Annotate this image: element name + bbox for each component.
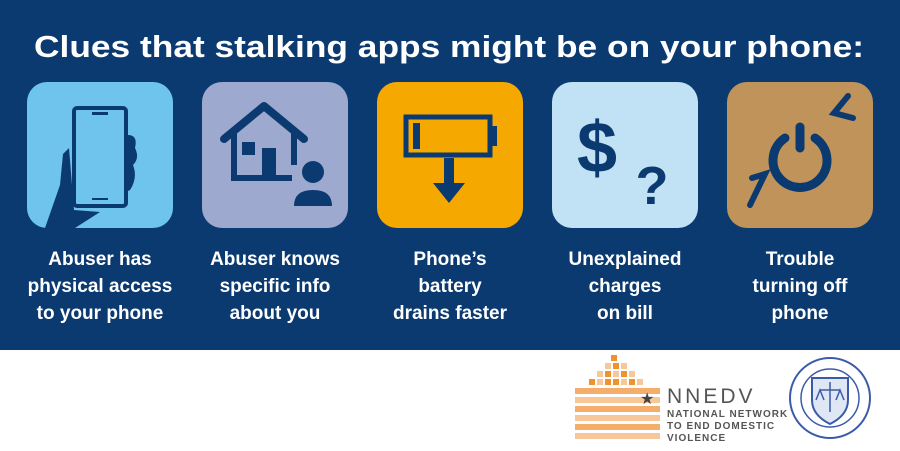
- text block: labels: phone: [772, 303, 828, 324]
- panel: blue background: [0, 0, 900, 350]
- icon: power button with sparks: [750, 96, 853, 205]
- text block: labels: physical access: [28, 276, 172, 297]
- text block: labels: to your phone: [37, 303, 163, 324]
- logo: NNEDV: ★: [640, 391, 654, 408]
- panel: trouble turning off: [727, 82, 873, 228]
- panel: knows specific info: [202, 82, 348, 228]
- text block: labels: Unexplained: [569, 249, 681, 270]
- logo: NNEDV: VIOLENCE: [667, 433, 726, 444]
- logo: NNEDV: NATIONAL NETWORK: [667, 409, 788, 420]
- logo: NNEDV: [575, 355, 788, 444]
- panel: unexplained charges: [552, 82, 698, 228]
- panel: physical access: [27, 82, 173, 228]
- icon: dollar and question mark: [577, 108, 668, 216]
- logo: NNEDV: NNEDV: [667, 385, 756, 408]
- text block: labels: Phone’s: [413, 249, 487, 270]
- text block: labels: Abuser knows: [210, 249, 340, 270]
- text block: labels: on bill: [597, 303, 653, 324]
- text block: labels: charges: [589, 276, 661, 297]
- text block: labels: about you: [230, 303, 320, 324]
- logo: FTC seal: [790, 358, 870, 438]
- text block: labels: drains faster: [393, 303, 508, 324]
- text block: labels: Abuser has: [48, 249, 152, 270]
- text block: labels: Trouble: [766, 249, 834, 270]
- icon: battery with down arrow: [406, 117, 497, 203]
- text block: labels: [28, 249, 848, 324]
- logo: NNEDV: TO END DOMESTIC: [667, 421, 775, 432]
- title: Clues that stalking apps might be on your phone:: [34, 29, 864, 64]
- icon: hand holding phone: [45, 108, 137, 228]
- icon: house and person: [224, 106, 332, 206]
- icon: dollar and question mark: ?: [636, 156, 668, 216]
- text block: labels: specific info: [220, 276, 330, 297]
- text block: labels: battery: [418, 276, 482, 297]
- icon: dollar and question mark: $: [577, 108, 617, 188]
- text block: labels: turning off: [753, 276, 848, 297]
- panel: battery drains: [377, 82, 523, 228]
